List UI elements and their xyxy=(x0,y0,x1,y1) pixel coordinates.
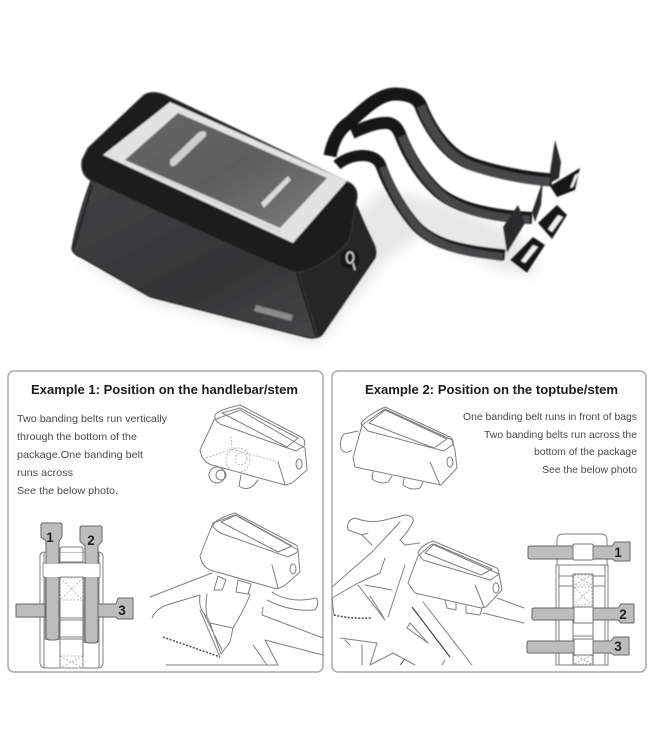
flap and buckle: lower xyxy=(503,205,525,253)
strap: lower xyxy=(337,155,545,273)
shadow under bag xyxy=(75,190,540,345)
heading: example 2: Example 2: Position on the toptube/stem xyxy=(365,382,618,397)
strap 1: 1 xyxy=(46,530,54,545)
text block: example 1 instructions: Two banding belts run vertically xyxy=(17,413,168,425)
text block: example 1 instructions: runs across xyxy=(17,467,73,479)
bag body xyxy=(72,178,376,338)
flap and buckle: middle xyxy=(532,180,543,222)
strap 2: 2 xyxy=(619,607,627,622)
text block: example 2 instructions: Two banding belts run across the xyxy=(484,429,637,441)
illustration: bag on handlebar with dotted clamp xyxy=(200,405,307,488)
strap 1 xyxy=(41,523,62,640)
illustration: bag mounted on top tube xyxy=(332,515,524,665)
text block: example 1 instructions xyxy=(17,413,168,497)
text block: example 1 instructions: See the below photo. xyxy=(17,485,118,497)
lid frame xyxy=(82,92,357,272)
text block: example 2 instructions: See the below photo xyxy=(542,464,637,476)
panel: example 1 xyxy=(8,371,323,672)
ring xyxy=(340,250,360,268)
diagram: strap layout for example 2 xyxy=(527,534,634,665)
strap: middle xyxy=(352,123,567,239)
phone screen logo xyxy=(170,131,206,166)
flap and buckle: top xyxy=(550,140,561,182)
strap 3: 3 xyxy=(614,639,622,654)
strap 1: 1 xyxy=(614,545,622,560)
bag right side xyxy=(298,205,376,337)
heading: example 1: Example 1: Position on the handlebar/stem xyxy=(31,382,298,397)
text block: example 1 instructions: through the bottom of the xyxy=(17,431,137,443)
panel: example 2 xyxy=(332,371,646,672)
strap 3: 3 xyxy=(118,603,126,618)
illustration: bag with front loop and lower straps xyxy=(340,407,457,489)
strap 2: 2 xyxy=(87,533,95,548)
phone xyxy=(103,102,347,243)
text block: example 2 instructions xyxy=(463,411,637,476)
text block: example 2 instructions: One banding belt runs in front of bags xyxy=(463,411,637,423)
logo on body xyxy=(254,305,293,321)
diagram: strap layout for example 1 xyxy=(16,523,133,668)
strap 2 xyxy=(80,526,102,643)
strap: top xyxy=(330,94,580,197)
text block: example 2 instructions: bottom of the package xyxy=(534,446,637,458)
text block: example 1 instructions: package.One banding belt xyxy=(17,449,143,461)
strap 3 xyxy=(16,598,133,619)
illustration: bag mounted on handlebar xyxy=(150,513,323,665)
product photo: bag with straps xyxy=(72,92,580,345)
